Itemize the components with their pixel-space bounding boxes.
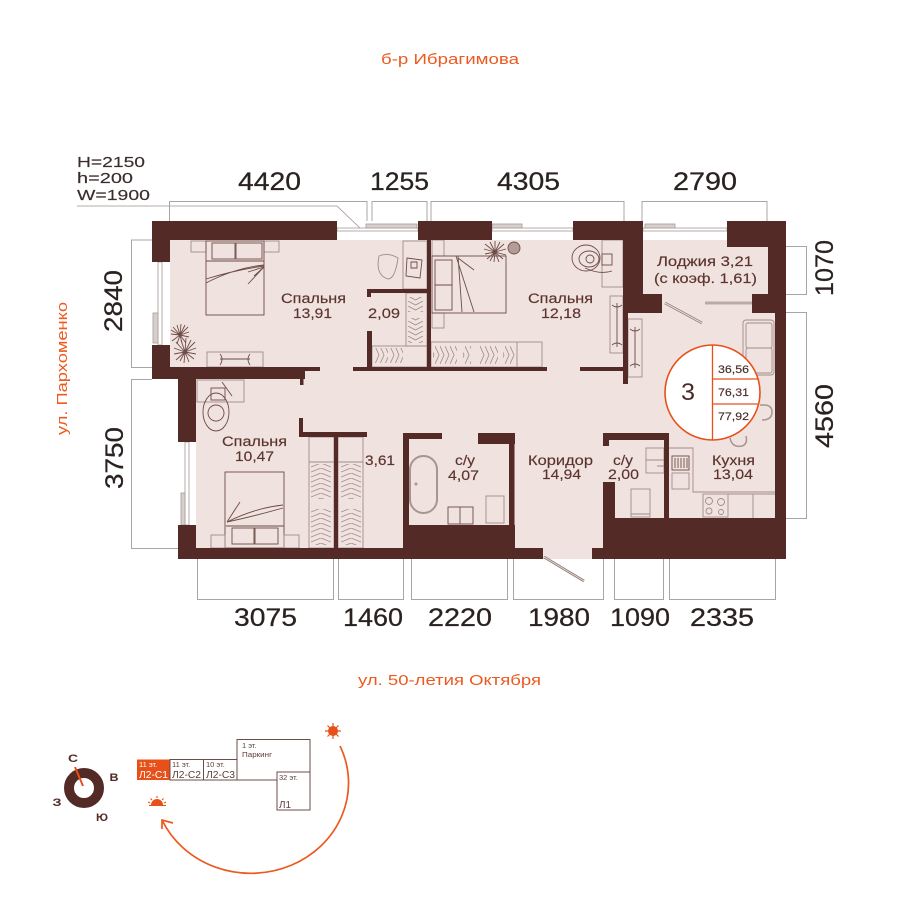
area badge: 76,31 xyxy=(718,387,749,399)
room labels: 12,18 xyxy=(541,306,581,321)
building key plan: Л1 xyxy=(279,800,291,811)
plants xyxy=(171,324,196,363)
street label: bottom: ул. 50-летия Октября xyxy=(358,672,541,689)
dimension numbers: 2220 xyxy=(428,604,492,632)
chair and desk xyxy=(378,254,398,279)
building key plan: 11 эт. xyxy=(172,760,190,769)
dimension numbers: 4305 xyxy=(497,168,560,196)
room labels: 13,91 xyxy=(293,306,332,321)
dimension numbers: 1070 xyxy=(811,240,839,296)
room labels: Спальня xyxy=(222,434,287,449)
dimension numbers: 4560 xyxy=(811,384,839,448)
walls xyxy=(152,221,786,559)
building key plan: Л2-С2 xyxy=(172,770,201,781)
room labels: 13,04 xyxy=(713,467,754,482)
room labels: с/у xyxy=(613,453,633,468)
area badge: 3 xyxy=(681,379,695,406)
building key plan: 32 эт. xyxy=(279,773,298,782)
furniture: bedroom 10.47 xyxy=(197,380,299,548)
room labels: 2,09 xyxy=(368,306,400,321)
plants xyxy=(484,241,520,262)
bathroom fixtures 4.07 xyxy=(410,456,504,524)
room labels: Лоджия 3,21 xyxy=(657,254,753,269)
area badge xyxy=(665,345,760,440)
doors xyxy=(544,303,752,581)
room labels: Спальня xyxy=(281,291,346,306)
icon: sun xyxy=(325,723,341,739)
dimension numbers xyxy=(100,168,839,632)
building key plan: 1 эт. xyxy=(242,741,257,750)
bed xyxy=(206,241,264,315)
room labels: 2,00 xyxy=(608,467,639,482)
bed xyxy=(432,256,506,313)
window specification xyxy=(77,155,361,229)
compass: В xyxy=(110,772,119,784)
building key plan: Паркинг xyxy=(242,750,272,759)
windows xyxy=(153,224,727,525)
room labels: Спальня xyxy=(528,291,593,306)
room labels: Коридор xyxy=(528,453,593,468)
room labels: 10,47 xyxy=(235,449,274,464)
bed xyxy=(225,472,284,548)
building key plan xyxy=(137,740,310,811)
room labels: 14,94 xyxy=(542,467,582,482)
floor area xyxy=(170,240,775,559)
arrow: sun path xyxy=(162,746,349,873)
room labels xyxy=(222,254,757,483)
dimension numbers: 1090 xyxy=(610,604,670,632)
dimension numbers: 2840 xyxy=(100,270,128,332)
window specification: W=1900 xyxy=(77,188,150,204)
chair and desk xyxy=(203,382,232,431)
window specification: h=200 xyxy=(77,171,133,187)
area badge: 77,92 xyxy=(718,411,749,423)
compass: З xyxy=(52,797,62,809)
window specification: H=2150 xyxy=(77,155,145,171)
building key plan: 11 эт. xyxy=(139,760,157,769)
dimension numbers: 3750 xyxy=(101,427,129,489)
dimension numbers: 1255 xyxy=(370,168,429,196)
closet 2.09 storage xyxy=(372,293,427,367)
furniture: bedroom 12.18 xyxy=(431,240,642,377)
wardrobes 3.61 xyxy=(309,437,363,548)
room labels: (с коэф. 1,61) xyxy=(654,271,757,286)
icon: sunset xyxy=(148,796,166,806)
room labels: 3,61 xyxy=(365,453,395,468)
area badge: 36,56 xyxy=(718,364,749,376)
building key plan: Л2-С3 xyxy=(206,770,235,781)
street label: top: б-р Ибрагимова xyxy=(381,51,520,68)
dimension numbers: 1460 xyxy=(343,604,403,632)
room labels: 4,07 xyxy=(448,468,479,483)
room labels: Кухня xyxy=(712,453,755,468)
compass xyxy=(52,753,119,824)
kitchen furniture xyxy=(669,448,775,518)
chair and desk items xyxy=(572,245,612,272)
dimension numbers: 2790 xyxy=(673,168,737,196)
bathroom fixtures 2.00 xyxy=(631,448,664,517)
dimension numbers: 1980 xyxy=(528,604,590,632)
kitchen sofa and table xyxy=(730,320,774,446)
dimension lines xyxy=(132,202,806,600)
compass: Ю xyxy=(96,812,108,824)
dimension numbers: 4420 xyxy=(238,168,301,196)
dimension numbers: 2335 xyxy=(690,604,754,632)
room labels: с/у xyxy=(455,453,475,468)
building key plan: Л2-С1 xyxy=(139,770,168,781)
street label: left: ул. Пархоменко xyxy=(54,302,71,435)
dimension numbers: 3075 xyxy=(234,604,297,632)
furniture: bedroom 13.91 xyxy=(171,241,427,367)
compass: С xyxy=(68,753,78,765)
building key plan: 10 эт. xyxy=(206,760,225,769)
